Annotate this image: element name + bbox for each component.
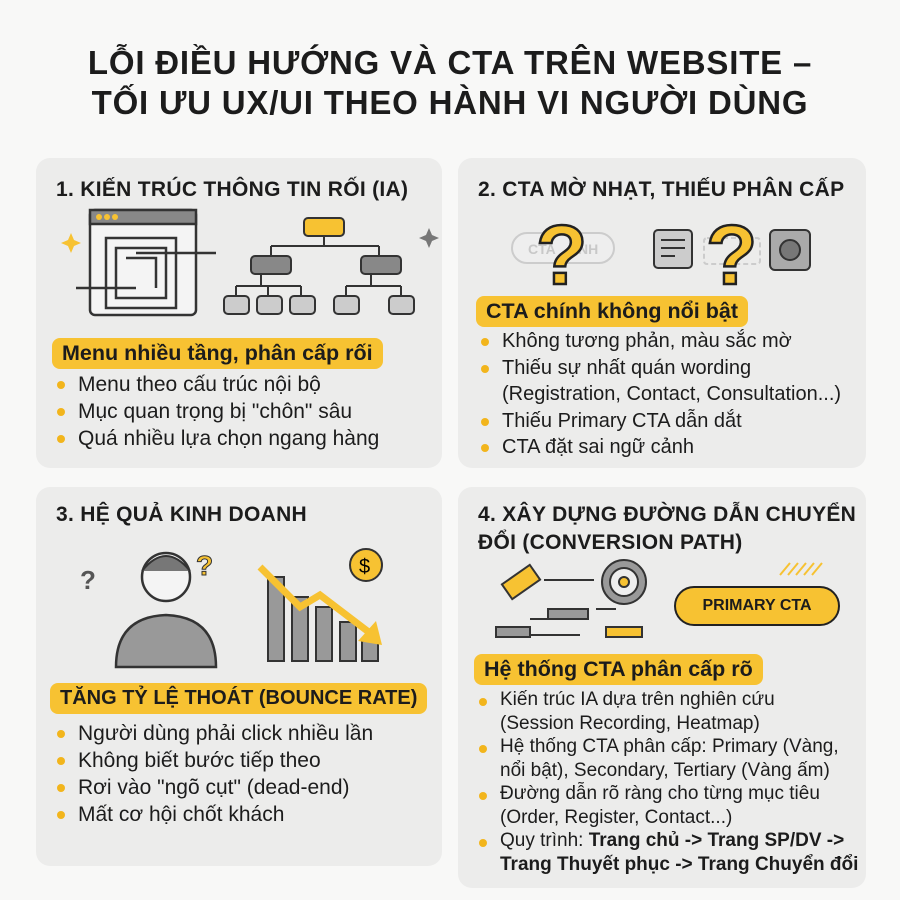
bullets 4: Hệ thống CTA phân cấp: Primary (Vàng, bbox=[500, 736, 839, 757]
panel: conversion path bbox=[458, 487, 866, 888]
title: LỖI ĐIỀU HƯỚNG VÀ CTA TRÊN WEBSITE – bbox=[88, 44, 812, 81]
illustration: path to target bbox=[495, 559, 823, 638]
bullets 3: Mất cơ hội chốt khách bbox=[78, 803, 284, 826]
highlight: bounce rate bbox=[50, 683, 427, 714]
bullets 1: Menu theo cấu trúc nội bộ bbox=[78, 373, 321, 396]
panel: hệ quả kinh doanh bbox=[36, 487, 442, 866]
heading 4: 4. XÂY DỰNG ĐƯỜNG DẪN CHUYỂN bbox=[478, 503, 856, 526]
bullets 4: Trang Thuyết phục -> Trang Chuyển đổi bbox=[500, 854, 858, 874]
bullets 4 bbox=[479, 689, 858, 874]
bullets 4: Đường dẫn rõ ràng cho từng mục tiêu bbox=[500, 783, 820, 804]
bullets 2 bbox=[481, 329, 841, 458]
bullets 4: nổi bật), Secondary, Tertiary (Vàng ấm) bbox=[500, 760, 830, 780]
icons: question marks: CTA bbox=[528, 241, 556, 257]
bullets 2: Thiếu Primary CTA dẫn dắt bbox=[502, 410, 742, 432]
heading 1: 1. KIẾN TRÚC THÔNG TIN RỐI (IA) bbox=[56, 178, 408, 201]
bullets 3: Không biết bước tiếp theo bbox=[78, 749, 321, 772]
highlight: menu: Menu nhiều tầng, phân cấp rối bbox=[62, 341, 373, 365]
bullets 4: (Session Recording, Heatmap) bbox=[500, 712, 760, 734]
title: TỐI ƯU UX/UI THEO HÀNH VI NGƯỜI DÙNG bbox=[92, 84, 808, 121]
bullets 1: Mục quan trọng bị "chôn" sâu bbox=[78, 400, 352, 423]
highlight: CTA chính: CTA chính không nổi bật bbox=[486, 299, 738, 323]
bullets 3 bbox=[57, 722, 373, 826]
bullets 3: Người dùng phải click nhiều lần bbox=[78, 722, 373, 745]
illustration: confused person and falling chart: $ bbox=[359, 556, 370, 578]
bullets 1: Quá nhiều lựa chọn ngang hàng bbox=[78, 427, 379, 450]
button: primary CTA: PRIMARY CTA bbox=[702, 597, 812, 614]
title bbox=[88, 44, 812, 121]
icons: question marks: NH bbox=[578, 241, 598, 257]
icon: maze window bbox=[61, 208, 439, 316]
highlight: hệ thống CTA: Hệ thống CTA phân cấp rõ bbox=[484, 657, 753, 681]
bullets 4: Kiến trúc IA dựa trên nghiên cứu bbox=[500, 689, 775, 710]
bullets 2: Thiếu sự nhất quán wording bbox=[502, 356, 751, 378]
bullets 2: (Registration, Contact, Consultation...) bbox=[502, 383, 841, 405]
heading 2: 2. CTA MỜ NHẠT, THIẾU PHÂN CẤP bbox=[478, 178, 844, 201]
heading 4: ĐỔI (CONVERSION PATH) bbox=[478, 531, 743, 554]
button: primary CTA bbox=[674, 586, 840, 626]
highlight: bounce rate: TĂNG TỶ LỆ THOÁT (BOUNCE RATE) bbox=[60, 687, 417, 709]
illustration: confused person and falling chart: ? bbox=[80, 565, 96, 595]
heading 4 bbox=[478, 502, 856, 554]
heading 3: 3. HỆ QUẢ KINH DOANH bbox=[56, 503, 307, 526]
panel: kiến trúc thông tin bbox=[36, 158, 442, 468]
tree bbox=[304, 218, 344, 236]
illustration: confused person and falling chart: ? bbox=[196, 550, 213, 581]
panel: CTA mờ nhạt bbox=[458, 158, 866, 468]
bullets 2: Không tương phản, màu sắc mờ bbox=[502, 330, 792, 352]
bullets 2: CTA đặt sai ngữ cảnh bbox=[502, 436, 694, 458]
bullets 1 bbox=[57, 373, 379, 450]
bullets 3: Rơi vào "ngõ cụt" (dead-end) bbox=[78, 776, 350, 799]
icons: question marks bbox=[511, 208, 811, 288]
illustration: confused person and falling chart bbox=[80, 548, 383, 668]
bullets 4: Quy trình: Trang chủ -> Trang SP/DV -> bbox=[500, 830, 844, 851]
bullets 4: (Order, Register, Contact...) bbox=[500, 806, 732, 828]
